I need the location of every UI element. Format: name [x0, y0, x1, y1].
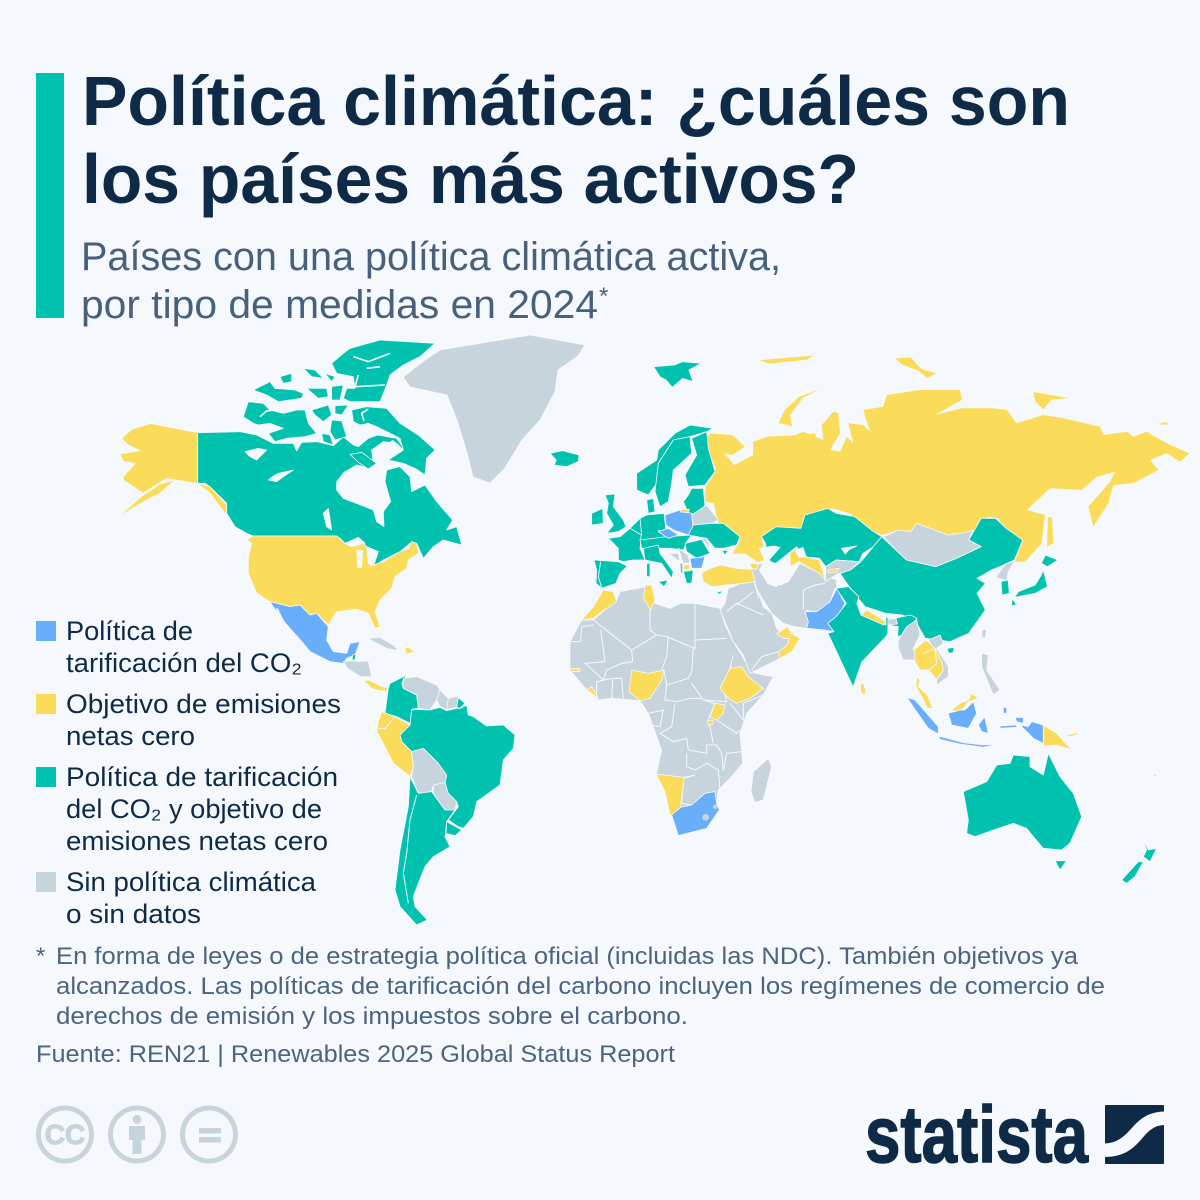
icon: creative commons [38, 1108, 92, 1161]
nigeria [629, 670, 664, 701]
japan [1011, 555, 1058, 606]
footnote: * [36, 943, 45, 970]
iran and central asia [750, 563, 860, 628]
russia west [705, 433, 824, 562]
mexico [270, 602, 360, 663]
legend item: net zero: netas cero [66, 721, 195, 751]
europe [592, 425, 740, 588]
arabia [720, 577, 798, 673]
oman [777, 627, 800, 658]
footnote: derechos de emisión y los impuestos sobre el carbono. [56, 1003, 688, 1030]
accent bar [36, 73, 64, 318]
greenland [403, 335, 585, 483]
korea [996, 562, 1014, 581]
source: Fuente: REN21 | Renewables 2025 Global Status Report [36, 1041, 675, 1068]
uzbekistan [790, 548, 826, 581]
uganda [710, 703, 725, 720]
ethiopia [720, 667, 763, 703]
myanmar [898, 620, 920, 660]
footnote: alcanzados. Las políticas de tarificación del carbono incluyen los regímenes de comercio de [56, 973, 1105, 1000]
legend [36, 616, 341, 929]
legend item: none: Sin política climática [66, 867, 317, 897]
turkey [702, 563, 758, 587]
australia [963, 753, 1082, 870]
legend item: net zero [36, 689, 341, 751]
title: los países más activos? [82, 140, 859, 218]
subtitle [81, 235, 781, 327]
new zealand [1122, 837, 1157, 883]
title [82, 62, 1070, 218]
canada [198, 340, 462, 567]
central america and caribbean [352, 654, 356, 660]
legend item: carbon pricing: Política de [66, 616, 193, 646]
legend item: both: Política de tarificación [66, 762, 338, 792]
usa [247, 536, 418, 628]
namibia [656, 774, 695, 815]
morocco [582, 590, 617, 620]
south africa [672, 792, 719, 836]
india [828, 587, 917, 687]
legend item: both: emisiones netas cero [66, 826, 328, 856]
legend item: carbon pricing: tarificación del CO₂ [66, 648, 302, 678]
mongolia [884, 523, 981, 567]
scandinavia [637, 425, 715, 515]
pakistan [805, 588, 845, 632]
icon: attribution [110, 1108, 164, 1161]
legend item: carbon pricing [36, 616, 302, 678]
legend item: both [36, 762, 338, 856]
czechia [658, 528, 678, 538]
iceland [550, 451, 579, 467]
legend item: none: o sin datos [66, 899, 201, 929]
footnote: En forma de leyes o de estrategia política oficial (incluidas las NDC). También objetivos ya [56, 943, 1079, 970]
vietnam [928, 635, 948, 685]
tunisia [643, 585, 655, 610]
indonesia [907, 697, 1043, 747]
icon: creative commons: CC [45, 1119, 85, 1150]
title: Política climática: ¿cuáles son [82, 62, 1070, 140]
thailand [914, 640, 943, 679]
subtitle: Países con una política climática activa, [81, 235, 781, 279]
africa [570, 585, 773, 836]
asia and russia [550, 355, 1189, 687]
south america [363, 675, 515, 925]
subtitle: * [599, 283, 608, 310]
papua new guinea [1043, 725, 1072, 750]
china [840, 518, 1023, 642]
cyprus [717, 591, 723, 594]
statista logo: statista [865, 1090, 1088, 1179]
footnote [36, 943, 1105, 1030]
legend item: both: del CO₂ y objetivo de [66, 794, 322, 824]
caspian sea [759, 546, 784, 587]
north america [118, 340, 462, 677]
svalbard [654, 362, 701, 387]
world map [118, 335, 1189, 925]
legend item: none [36, 867, 317, 929]
middle east [717, 563, 860, 673]
russia east [780, 390, 1189, 562]
poland [665, 510, 693, 535]
nepal [861, 610, 886, 625]
kazakhstan [761, 508, 882, 567]
alaska [118, 423, 227, 517]
madagascar [751, 758, 772, 802]
subtitle: por tipo de medidas en 2024 [81, 283, 598, 327]
icon: no derivatives [182, 1108, 236, 1161]
southeast asia and oceania [861, 620, 1157, 883]
legend item: net zero: Objetivo de emisiones [66, 689, 341, 719]
